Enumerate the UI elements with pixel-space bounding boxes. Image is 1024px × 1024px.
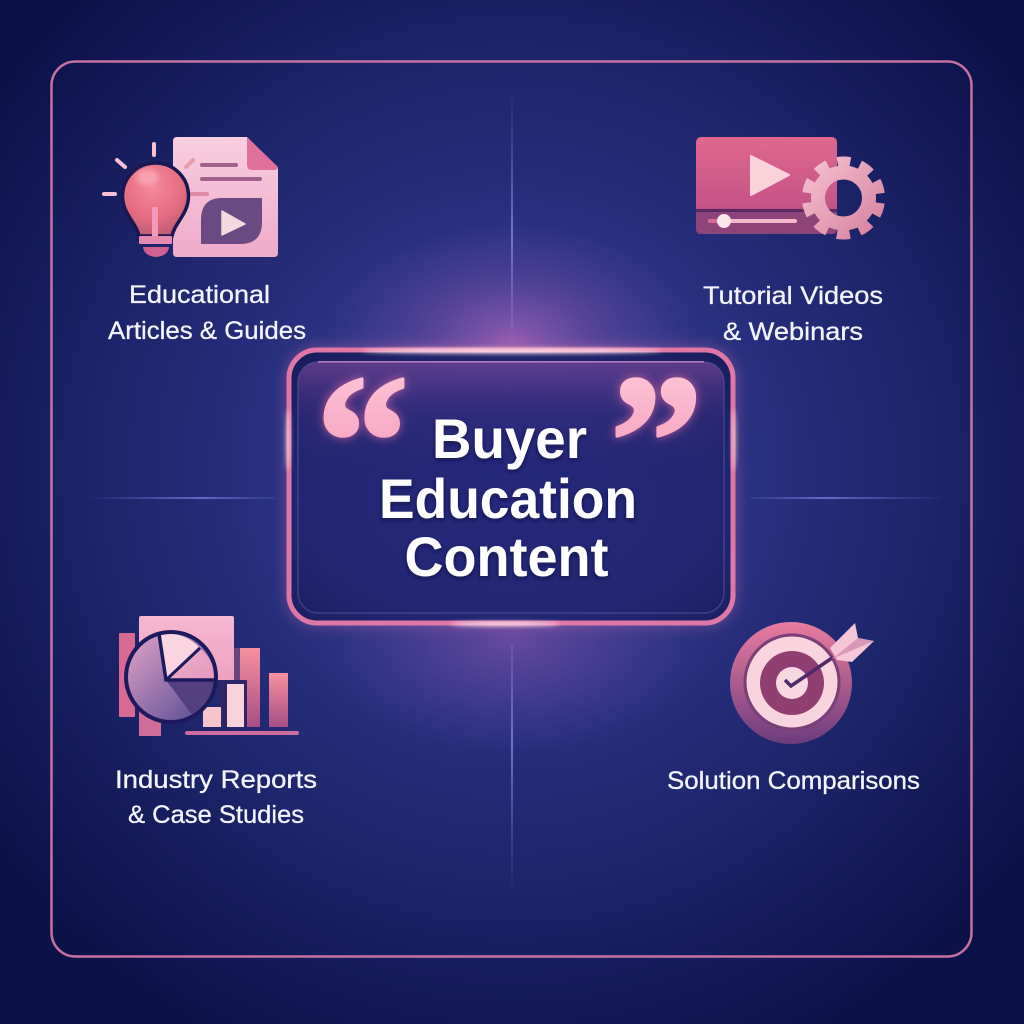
outer frame (52, 62, 972, 956)
label: industry reports and case studies: Industry Reports (115, 766, 317, 794)
icon: report charts (119, 616, 299, 736)
label: educational articles and guides: Educational (129, 281, 270, 309)
icon: video player and gear (696, 137, 879, 234)
gear (808, 162, 879, 234)
label: industry reports and case studies (115, 766, 317, 829)
label: educational articles and guides: Articles & Guides (108, 317, 306, 345)
label: tutorial videos and webinars: Tutorial Videos (703, 282, 883, 310)
report sheet (139, 616, 234, 736)
title: Education (379, 467, 637, 530)
title (379, 407, 637, 588)
title: Buyer (432, 407, 587, 470)
bulb rays (104, 144, 207, 194)
quotation mark left: “ (316, 336, 409, 546)
page fold (247, 137, 278, 170)
progress bar (708, 219, 797, 223)
arrow (785, 658, 832, 686)
center panel (286, 336, 736, 626)
quotation mark right: ” (610, 336, 703, 546)
video thumbnail (201, 198, 262, 244)
play button (751, 156, 789, 195)
pie chart (126, 632, 216, 722)
label: educational articles and guides (108, 281, 306, 345)
bulb (122, 163, 188, 236)
bars (234, 648, 260, 727)
label: solution comparisons: Solution Comparisons (667, 767, 920, 795)
video player (696, 137, 837, 234)
icon: light bulb and document (104, 137, 278, 257)
icon: target with arrow (730, 622, 874, 744)
title: Content (404, 525, 608, 588)
document page (173, 137, 278, 257)
label: tutorial videos and webinars (703, 282, 883, 346)
label: tutorial videos and webinars: & Webinars (723, 318, 863, 346)
label: industry reports and case studies: & Case Studies (128, 801, 304, 829)
